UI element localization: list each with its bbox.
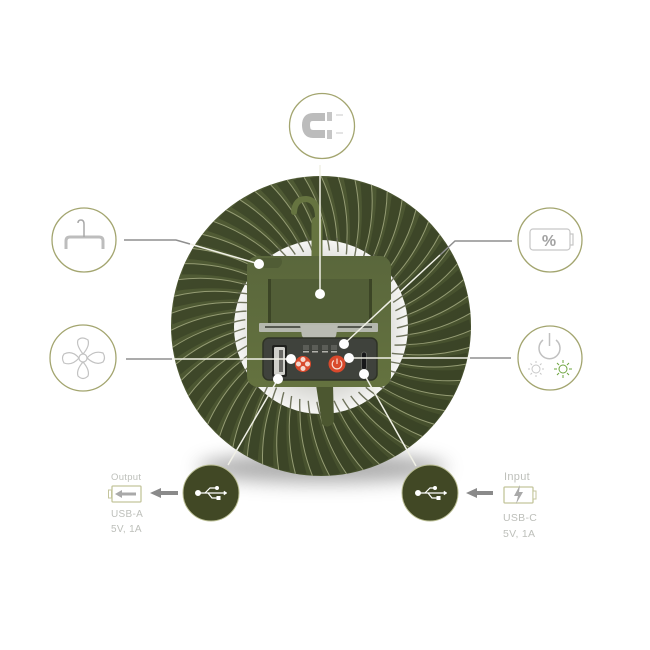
fan device [154,156,492,493]
fan outer disc [171,176,471,476]
black control face [263,338,377,380]
lower stem [316,385,334,427]
icon: fan [50,325,116,391]
magnet line [319,165,321,294]
battery percent line [344,241,512,344]
power button [328,356,346,372]
clear hinge clip [259,323,378,340]
arrow: output [150,488,178,498]
USB input badge [402,465,458,521]
icon: input battery [504,485,536,504]
arrow: input [466,488,493,498]
USB output badge [183,465,239,521]
sun bright [554,360,572,378]
USB-C port [362,352,366,370]
fan blade ribs [154,156,491,493]
magnet recess [268,279,372,323]
hanging hook [294,199,318,258]
icon: hook [52,208,116,272]
output spec: USB-A [111,509,143,520]
input heading: Input [504,471,530,483]
output label block: 5V, 1A [111,524,142,535]
USB-A line [228,379,278,465]
fan button [295,356,311,372]
hook latch [260,258,282,268]
hook line [124,240,259,264]
output label block [108,472,143,535]
icon: power and brightness [518,326,582,390]
fan blade shading [154,156,492,493]
icon: magnet [290,94,354,158]
input spec: USB-C [503,512,537,524]
input label block [503,471,537,540]
callout dots [254,259,369,384]
icon: output battery [108,486,141,502]
USB-A port [272,345,287,377]
icon: USB symbol [196,486,227,500]
fan mode line [126,358,291,360]
icon: USB symbol [416,486,447,500]
USB-C line [364,374,416,466]
sun dim [528,361,544,377]
ground shadow under fan [197,453,447,483]
battery LEDs [303,345,337,352]
white inner ring [234,240,408,414]
icon: battery percent [518,208,582,272]
output heading: Output [111,472,141,483]
input label block: 5V, 1A [503,528,535,540]
callout lines [124,165,512,466]
percent sign: % [542,233,556,250]
power line [349,357,511,359]
control panel body [247,256,391,387]
